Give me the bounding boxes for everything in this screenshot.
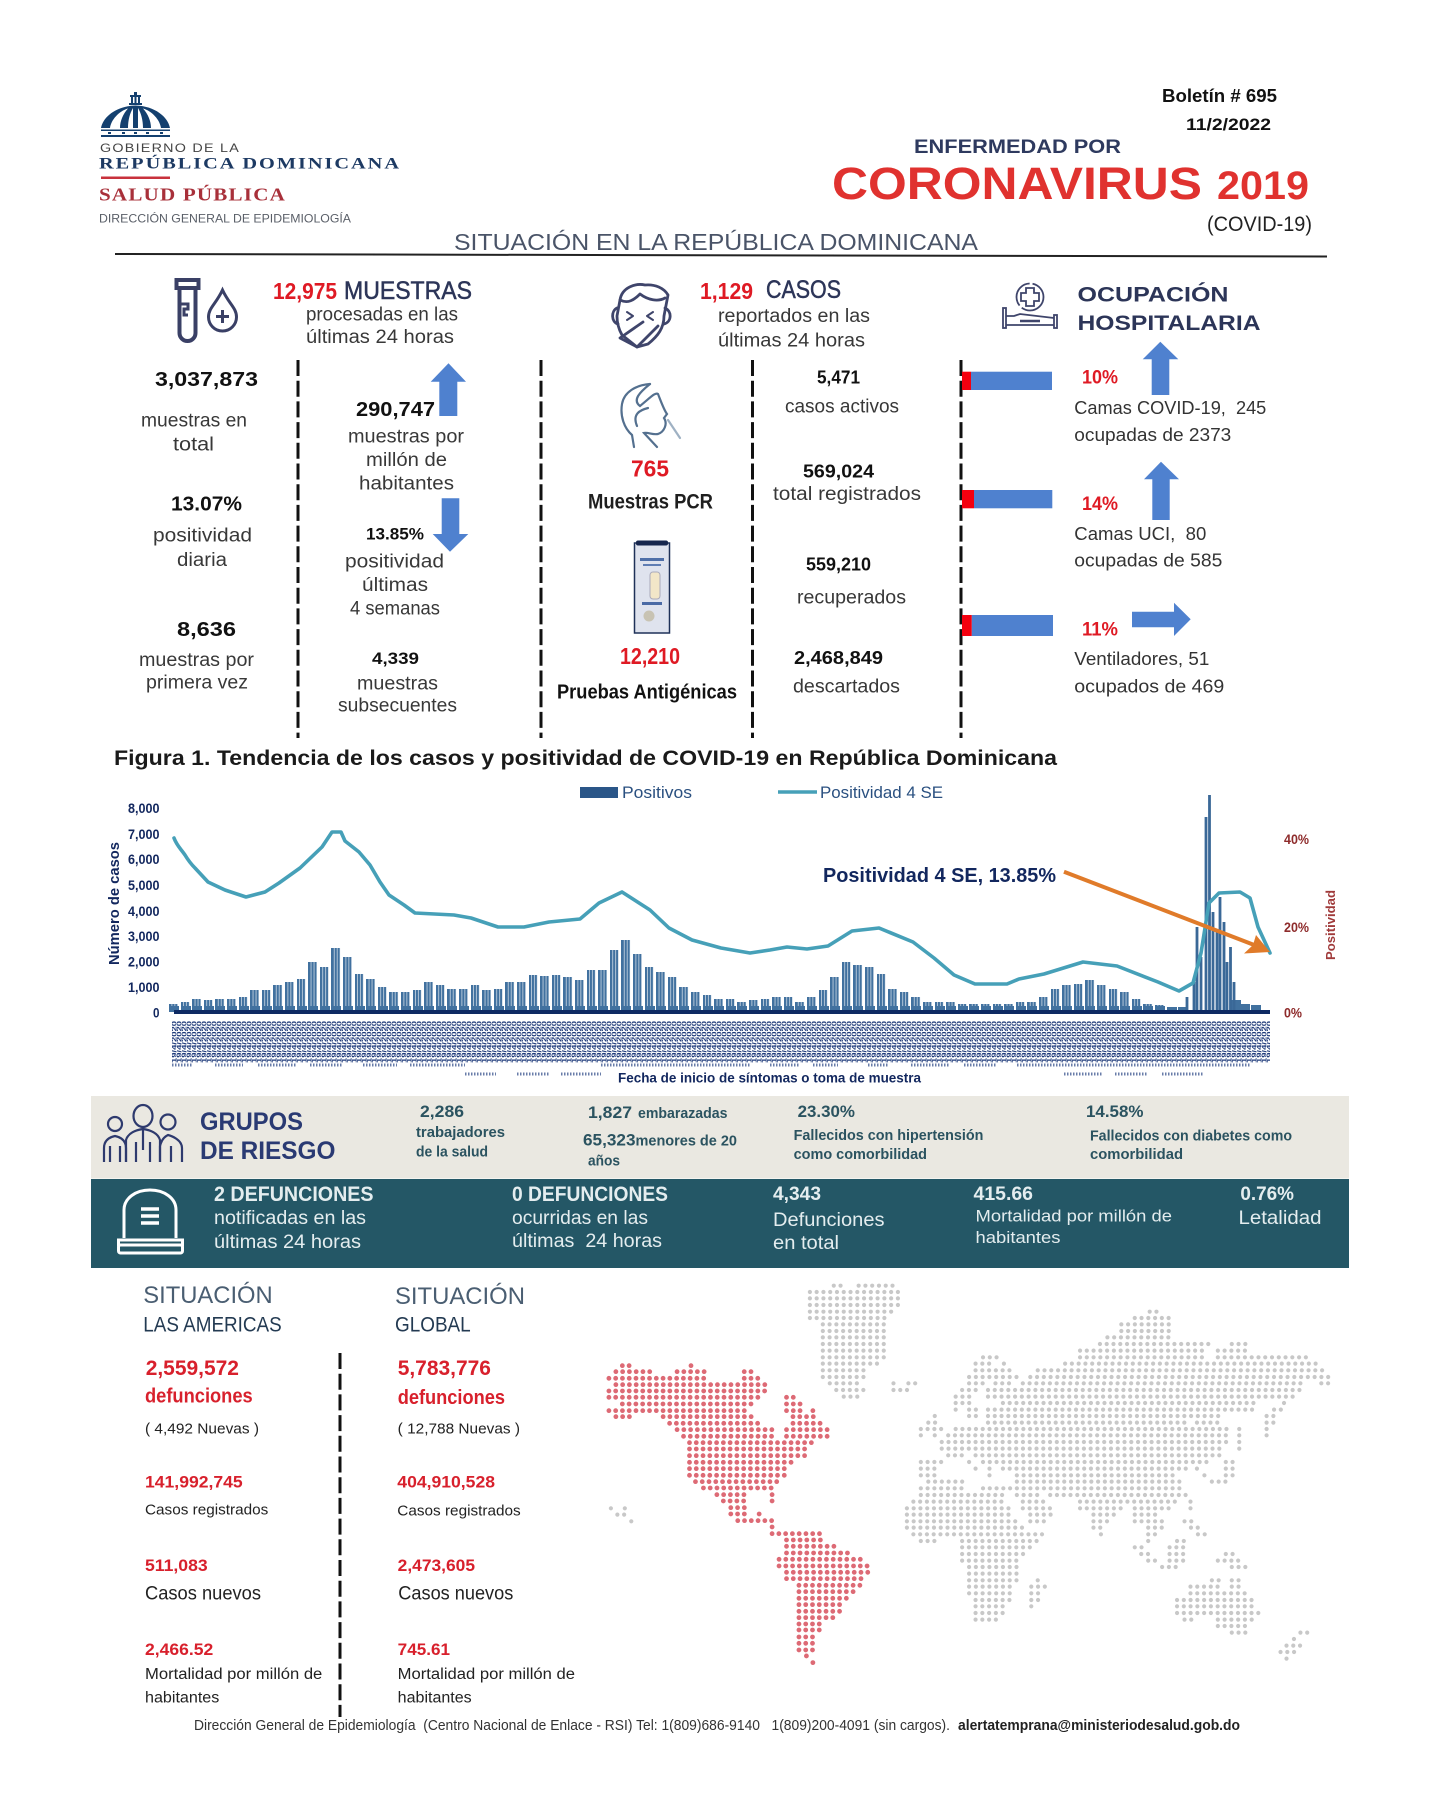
- heading: casos: 1,129: [700, 278, 753, 304]
- callout: positividad 4 se: Positividad 4 SE, 13.85%: [823, 865, 1056, 887]
- panel: situación global: Casos registrados: [397, 1503, 521, 1520]
- x axis date labels: [172, 1021, 1270, 1074]
- panel: situación global: 2,473,605: [398, 1556, 475, 1575]
- stat: ventiladores: Ventiladores, 51: [1074, 649, 1209, 669]
- heading: ocupación hospitalaria: OCUPACIÓN: [1078, 283, 1228, 307]
- panel: muestras: MUESTRAS: [344, 277, 472, 305]
- stat: trabajadores de la salud: de la salud: [416, 1144, 488, 1161]
- stat: ventiladores: [1074, 620, 1224, 697]
- line: positividad 4 se: [174, 832, 1270, 991]
- stat: pruebas antigénicas: 12,210: [620, 643, 680, 669]
- panel: muestras: subsecuentes: [338, 696, 457, 717]
- arrow: orange: [1064, 872, 1270, 954]
- arrow: down: [433, 498, 468, 552]
- stat: camas uci: 14%: [1082, 494, 1118, 515]
- right axis labels: 40%: [1284, 831, 1309, 847]
- stat: embarazadas: 1,827: [588, 1103, 632, 1122]
- panel: situación las américas: Casos registrados: [145, 1502, 268, 1519]
- panel: situación global: 5,783,776: [398, 1357, 491, 1380]
- panel: muestras: 4 semanas: [350, 598, 440, 619]
- panel: muestras: millón de: [366, 450, 447, 471]
- panel: muestras: positividad: [345, 551, 444, 572]
- panel: situación global: defunciones: [398, 1387, 505, 1409]
- stat: menores de 20 años: años: [588, 1153, 620, 1170]
- bar: camas uci: [962, 490, 1052, 508]
- panel: situación las américas: 511,083: [145, 1556, 208, 1575]
- bar: ventiladores: [962, 615, 1053, 636]
- stat: defunciones en total: 4,343: [773, 1184, 821, 1205]
- left axis labels: 5,000: [128, 877, 160, 893]
- stat: letalidad: Letalidad: [1238, 1208, 1322, 1229]
- panel: situación global: habitantes: [398, 1690, 472, 1707]
- heading: muestras: 12,975: [273, 278, 337, 304]
- map: americas: [609, 1366, 870, 1663]
- x axis title: Fecha de inicio de síntomas o toma de muestra: [618, 1070, 921, 1086]
- panel: situación las américas: LAS AMERICAS: [143, 1314, 282, 1337]
- left axis labels: [106, 800, 160, 1021]
- stat: defunciones en total: [773, 1184, 884, 1254]
- stat: registrados: 569,024: [803, 461, 874, 481]
- left axis labels: 8,000: [128, 800, 160, 816]
- panel: muestras: [139, 277, 472, 717]
- panel: situación global: 745.61: [398, 1640, 450, 1659]
- panel: grupos de riesgo: [91, 1096, 1349, 1178]
- bulletin number and date: 11/2/2022: [1186, 115, 1271, 134]
- panel: casos: total registrados: [773, 484, 921, 505]
- panel: grupos de riesgo: DE RIESGO: [200, 1137, 336, 1165]
- stat: subsecuentes: 4,339: [372, 649, 419, 668]
- stat: camas covid: [1074, 367, 1266, 445]
- panel: situación global: SITUACIÓN: [395, 1283, 525, 1310]
- text: gobierno de la: GOBIERNO DE LA: [100, 143, 240, 155]
- subtitle: situación en la república dominicana: SITUACIÓN EN LA REPÚBLICA DOMINICANA: [454, 229, 978, 255]
- map: rest of world: [611, 1286, 1332, 1659]
- panel: muestras: muestras: [357, 673, 438, 694]
- stat: defunciones en total: en total: [773, 1233, 839, 1254]
- stat: defunciones ocurridas: últimas 24 horas: [512, 1231, 662, 1252]
- stat: mortalidad: habitantes: [976, 1228, 1060, 1247]
- panel: situación las américas: SITUACIÓN: [143, 1282, 273, 1309]
- left axis labels: Número de casos: [106, 842, 123, 965]
- legend: [580, 783, 943, 802]
- icon: hospital bed: [1003, 284, 1057, 328]
- panel: situación global: Mortalidad por millón de: [398, 1666, 575, 1683]
- panel: muestras: muestras por: [348, 427, 465, 448]
- left axis labels: 2,000: [128, 954, 160, 970]
- stat: mortalidad: 415.66: [974, 1184, 1033, 1205]
- red rule: [101, 176, 170, 179]
- panel: situación las américas: defunciones: [145, 1386, 253, 1408]
- panel: muestras: primera vez: [146, 672, 248, 693]
- stat: camas uci: ocupadas de 585: [1074, 551, 1222, 571]
- panel: muestras: muestras por: [139, 650, 255, 671]
- legend: Positivos: [622, 783, 692, 802]
- legend: Positividad 4 SE: [820, 783, 943, 802]
- icon: people: [104, 1105, 182, 1162]
- stat: defunciones notificadas: últimas 24 horas: [214, 1232, 361, 1253]
- stat: activos: 5,471: [817, 367, 860, 387]
- arrow: up: [1144, 462, 1179, 520]
- panel: situación global: GLOBAL: [395, 1314, 471, 1337]
- stat: letalidad: 0.76%: [1240, 1184, 1294, 1205]
- panel: muestras: últimas 24 horas: [306, 327, 454, 348]
- stat: hipertensión: 23.30%: [798, 1102, 855, 1121]
- panel: muestras: muestras en: [141, 411, 247, 432]
- panel: casos: CASOS: [766, 276, 841, 304]
- text: salud pública: SALUD PÚBLICA: [99, 185, 286, 205]
- panel: situación las américas: Casos nuevos: [145, 1583, 261, 1604]
- stat: trabajadores de la salud: [416, 1102, 505, 1161]
- stat: diabetes: comorbilidad: [1090, 1146, 1183, 1163]
- panel: situación global: Casos nuevos: [398, 1583, 513, 1604]
- stat: camas covid: ocupadas de 2373: [1074, 425, 1231, 445]
- panel: situación global: ( 12,788 Nuevas ): [398, 1420, 520, 1437]
- stat: hipertensión: como comorbilidad: [794, 1146, 927, 1163]
- column dividers: [298, 360, 961, 738]
- panel: muestras: habitantes: [359, 473, 454, 494]
- left axis labels: 3,000: [128, 928, 160, 944]
- stat: camas covid: Camas COVID-19, 245: [1074, 398, 1266, 418]
- text: dirección general: DIRECCIÓN GENERAL DE EPIDEMIOLOGÍA: [99, 211, 351, 226]
- icon: test tube and drop: [176, 280, 236, 341]
- footer: alertatemprana@ministeriodesalud.gob.do: [958, 1718, 1240, 1734]
- stat: embarazadas: embarazadas: [638, 1105, 728, 1122]
- arrow: up: [1143, 342, 1178, 395]
- chart: casos y positividad: [106, 783, 1338, 1086]
- panel: muestras: procesadas en las: [306, 305, 458, 326]
- title: (COVID-19): [1207, 213, 1312, 236]
- stat: ventiladores: 11%: [1082, 620, 1118, 641]
- stat: ventiladores: ocupados de 469: [1074, 677, 1224, 697]
- bar: camas covid: [962, 372, 1052, 390]
- stat: trabajadores de la salud: 2,286: [420, 1102, 464, 1121]
- panel: ocupación hospitalaria: HOSPITALARIA: [1078, 312, 1260, 335]
- panel: casos: Muestras PCR: [588, 490, 713, 513]
- icon: dome: [101, 92, 170, 137]
- title: [832, 136, 1312, 236]
- stat: positividad 4 semanas: 13.85%: [366, 524, 424, 543]
- stat: defunciones ocurridas: 0 DEFUNCIONES: [512, 1183, 668, 1206]
- stat: diabetes: [1086, 1102, 1292, 1163]
- stat: trabajadores de la salud: trabajadores: [416, 1124, 505, 1141]
- title: ENFERMEDAD POR: [914, 136, 1121, 158]
- figure title: Figura 1. Tendencia de los casos y positividad de COVID-19 en República Dominicana: [114, 747, 1057, 770]
- stat: por millón: 290,747: [356, 399, 435, 421]
- right axis labels: 20%: [1284, 919, 1309, 935]
- icon: tombstone: [118, 1190, 182, 1253]
- icon: swab: [621, 384, 680, 447]
- panel: casos: recuperados: [797, 587, 906, 608]
- stat: diabetes: Fallecidos con diabetes como: [1090, 1128, 1292, 1145]
- stat: mortalidad: Mortalidad por millón de: [976, 1207, 1172, 1226]
- stat: camas uci: Camas UCI, 80: [1074, 524, 1206, 544]
- footer: Dirección General de Epidemiología (Centro Nacional de Enlace - RSI) Tel: 1(809)686-9140 1(809)200-4091 (sin cargos).: [194, 1718, 950, 1734]
- stat: letalidad: [1238, 1184, 1322, 1229]
- heading: grupos de riesgo: GRUPOS: [200, 1108, 303, 1136]
- logo: gobierno de la república dominicana: [99, 92, 401, 226]
- stat: defunciones notificadas: 2 DEFUNCIONES: [214, 1183, 374, 1206]
- panel: situación global: [395, 1283, 575, 1707]
- panel: defunciones: [91, 1179, 1349, 1268]
- stat: defunciones en total: Defunciones: [773, 1210, 884, 1231]
- panel: muestras: total: [173, 435, 214, 456]
- stat: descartados: 2,468,849: [794, 648, 883, 668]
- panel: casos: Pruebas Antigénicas: [557, 681, 737, 703]
- bulletin number and date: [1162, 86, 1277, 134]
- stat: camas uci: [1074, 494, 1222, 571]
- panel: casos: descartados: [793, 677, 900, 698]
- stat: defunciones ocurridas: ocurridas en las: [512, 1208, 648, 1229]
- stat: embarazadas: [588, 1103, 728, 1122]
- title: CORONAVIRUS: [832, 158, 1202, 209]
- stat: total: 3,037,873: [155, 369, 258, 391]
- stat: menores de 20 años: menores de 20: [636, 1133, 737, 1150]
- stat: defunciones notificadas: notificadas en las: [214, 1208, 366, 1229]
- arrow: right: [1132, 603, 1191, 636]
- dotted world map: [609, 1286, 1332, 1663]
- stat: primera vez: 8,636: [177, 619, 236, 641]
- bulletin number and date: Boletín # 695: [1162, 86, 1277, 106]
- panel: situación las américas: 2,466.52: [145, 1640, 213, 1659]
- panel: situación las américas: [143, 1282, 322, 1707]
- panel: muestras: diaria: [177, 550, 227, 571]
- stat: camas covid: 10%: [1082, 367, 1118, 388]
- left axis labels: 1,000: [128, 979, 160, 995]
- panel: casos: casos activos: [785, 396, 899, 417]
- panel: situación las américas: ( 4,492 Nuevas ): [145, 1420, 259, 1437]
- stat: menores de 20 años: 65,323: [583, 1131, 636, 1150]
- arrow: up: [431, 363, 466, 416]
- bars: positivos: [169, 795, 1256, 1012]
- panel: muestras: positividad: [153, 526, 252, 547]
- panel: muestras: últimas: [362, 575, 428, 596]
- stat: diabetes: 14.58%: [1086, 1102, 1144, 1121]
- left axis labels: 4,000: [128, 903, 160, 919]
- left axis labels: 7,000: [128, 826, 160, 842]
- right axis labels: Positividad: [1323, 890, 1338, 960]
- stat: hipertensión: Fallecidos con hipertensión: [794, 1127, 983, 1144]
- stat: defunciones notificadas: [214, 1183, 374, 1253]
- panel: situación las américas: habitantes: [145, 1690, 220, 1707]
- panel: situación las américas: 2,559,572: [146, 1357, 239, 1380]
- icon: antigen test cassette: [634, 540, 670, 633]
- stat: positividad diaria: 13.07%: [171, 494, 242, 516]
- right axis labels: 0%: [1284, 1005, 1302, 1021]
- stat: menores de 20 años: [583, 1131, 737, 1170]
- stat: hipertensión: [794, 1102, 983, 1163]
- title: 2019: [1217, 164, 1309, 208]
- panel: situación las américas: Mortalidad por millón de: [145, 1666, 322, 1683]
- stat: mortalidad: [974, 1184, 1172, 1247]
- stat: muestras pcr: 765: [631, 456, 669, 482]
- text: república dominicana: REPÚBLICA DOMINICANA: [99, 155, 401, 172]
- icon: face with mask: [613, 285, 670, 347]
- panel: casos: últimas 24 horas: [718, 331, 865, 352]
- panel: casos: reportados en las: [718, 306, 870, 327]
- panel: ocupación hospitalaria: [962, 283, 1266, 697]
- panel: situación las américas: 141,992,745: [145, 1473, 243, 1492]
- right axis labels: [1284, 831, 1338, 1021]
- baseline: [174, 1010, 1270, 1014]
- left axis labels: 0: [153, 1005, 160, 1021]
- stat: defunciones ocurridas: [512, 1183, 668, 1252]
- panel: situación global: 404,910,528: [397, 1473, 495, 1492]
- stat: recuperados: 559,210: [806, 555, 871, 575]
- panel: casos: [557, 276, 921, 703]
- left axis labels: 6,000: [128, 851, 160, 867]
